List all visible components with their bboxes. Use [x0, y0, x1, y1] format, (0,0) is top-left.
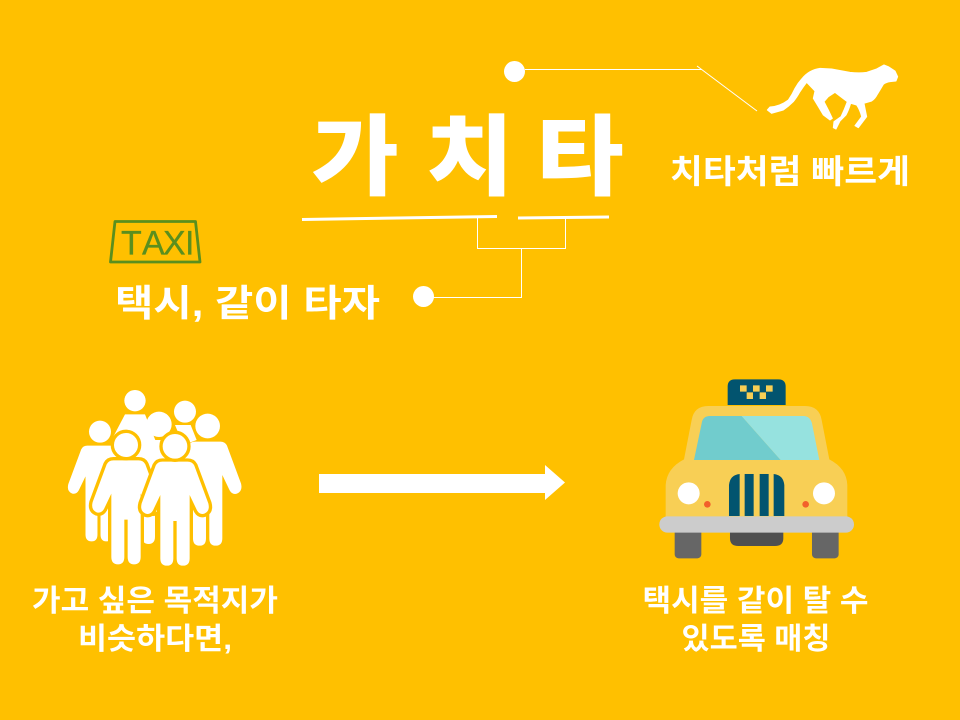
tyres — [675, 527, 839, 558]
headlights — [678, 482, 835, 508]
caption: similar destinations — [32, 585, 278, 656]
roof sign — [728, 379, 786, 405]
connector: title to taxi caption — [413, 216, 566, 307]
title: 가 — [311, 109, 399, 207]
title — [311, 109, 624, 207]
front person: right — [141, 434, 209, 566]
icon: taxi front — [659, 379, 854, 558]
icon: group of people — [68, 390, 241, 566]
title: 타 — [536, 109, 624, 207]
icon: taxi sign: TAXI — [121, 224, 194, 262]
caption: matching: 택시를 같이 탈 수 — [642, 585, 868, 618]
bumper — [659, 516, 854, 533]
back person: left — [68, 446, 130, 541]
icon: cheetah — [767, 65, 898, 129]
under bumper — [730, 527, 783, 546]
grille — [729, 474, 784, 516]
connector: title to cheetah — [504, 61, 757, 111]
caption: matching: 있도록 매칭 — [682, 623, 830, 656]
caption: similar destinations: 가고 싶은 목적지가 — [32, 585, 278, 618]
back person: right — [174, 442, 241, 546]
body — [666, 406, 847, 520]
arrow — [319, 465, 565, 500]
caption: matching — [642, 585, 868, 656]
back person: upper right — [174, 401, 197, 445]
caption: similar destinations: 비슷하다면, — [78, 623, 232, 656]
title underline — [302, 216, 609, 220]
front person: left — [92, 433, 160, 564]
windshield — [694, 416, 819, 460]
caption: share a taxi: 택시, 같이 타자 — [115, 283, 380, 324]
caption: like a cheetah: 치타처럼 빠르게 — [670, 153, 910, 190]
back person: middle — [123, 440, 190, 544]
back person: top — [103, 390, 157, 540]
title: 치 — [426, 109, 514, 207]
